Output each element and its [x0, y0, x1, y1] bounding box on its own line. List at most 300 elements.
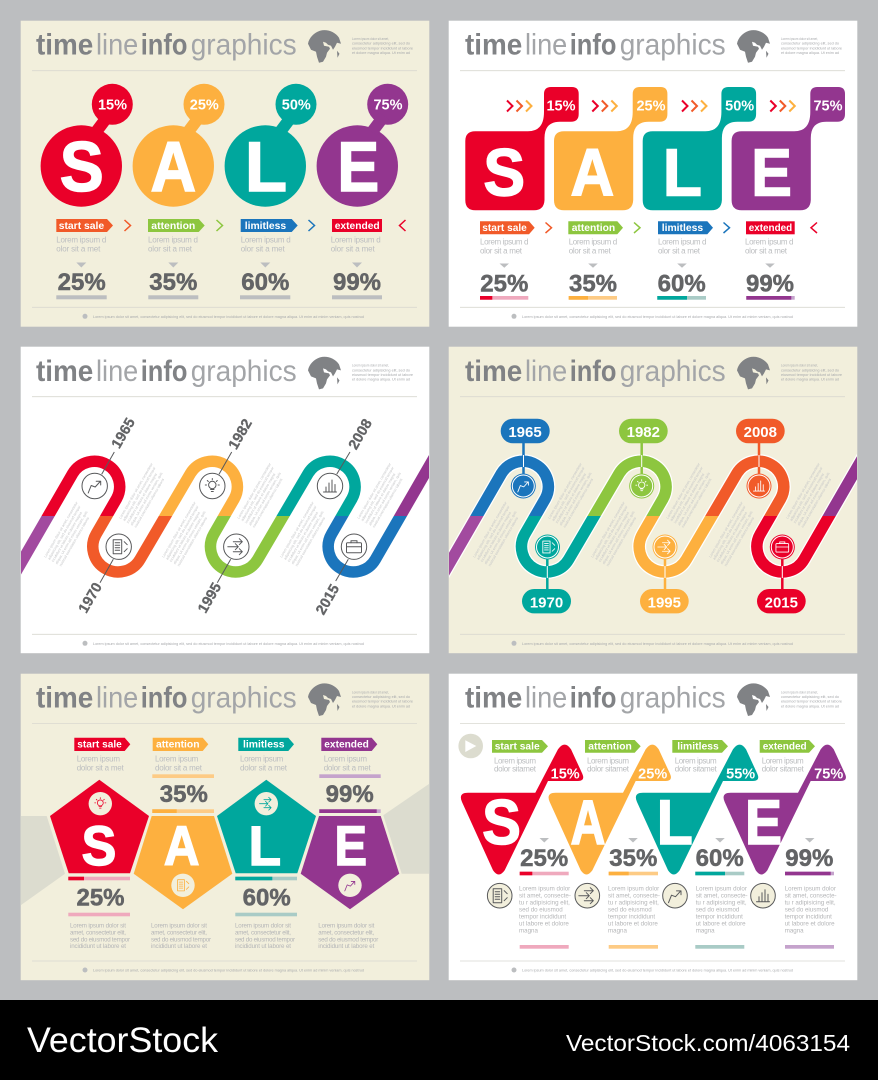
text blocks top: dolor sit a met	[324, 763, 371, 772]
rotated text blocks: adipisicing elit, sed do eiusmod tempor	[283, 504, 318, 561]
pentagon: A: A	[164, 814, 200, 877]
header: et dolore magna aliqua. Ut enim ad	[781, 704, 839, 708]
tag: limitless	[658, 221, 730, 234]
header: Lorem ipsum dolor sit amet,	[781, 690, 818, 694]
header: time	[465, 355, 522, 388]
tag: limitless	[241, 219, 314, 232]
paragraphs: ut labore et dolore	[519, 920, 569, 927]
header: line	[96, 682, 138, 715]
rotated text blocks: Lorem ipsum dolor sit amet, consectetur	[279, 500, 315, 558]
rotated text blocks: nostrud exercitation ullamco laboris	[177, 516, 208, 567]
paragraphs: tempor incididunt	[608, 913, 655, 920]
header	[32, 28, 417, 71]
marker: 1965	[501, 419, 550, 498]
header: Lorem ipsum dolor sit amet,	[352, 364, 389, 368]
paragraphs	[70, 922, 378, 950]
footer note: Lorem ipsum dolor sit amet, consectetur adipisicing elit, sed do eiusmod tempor incididunt ut labore et dolore magna aliqua. Ut enim ad minim veniam, quis nostrud	[522, 315, 793, 319]
text blocks top: dolor sitamet	[494, 765, 537, 774]
paragraphs: sit amet, consecte-	[785, 893, 837, 900]
text blocks top: Lorem ipsum	[762, 756, 804, 765]
stats row: 35%	[569, 271, 617, 298]
marker: 1965: 1965	[508, 424, 542, 441]
shape: orange circle A: 25%	[190, 98, 219, 114]
rotated text blocks: aliqua. Ut enim ad minim veniam, quis	[173, 510, 207, 565]
rotated text blocks: aliqua. Ut enim ad minim veniam, quis	[559, 472, 593, 526]
rotated text blocks: nostrud exercitation ullamco laboris	[681, 478, 713, 528]
rotated text blocks: incididunt ut labore et dolore magna	[555, 473, 587, 524]
paragraphs: Lorem ipsum dolor	[608, 886, 659, 893]
shape: orange circle A	[133, 84, 224, 207]
text blocks	[480, 238, 794, 255]
header: time	[36, 355, 93, 388]
pentagon: L: L	[249, 814, 281, 877]
triangle: L	[636, 745, 758, 874]
header: time	[465, 28, 522, 61]
year labels: 1970	[76, 580, 106, 616]
panel: sale pentagons	[21, 674, 429, 980]
pentagon: L	[217, 780, 316, 877]
shape: purple square E: E	[751, 136, 792, 210]
shape: purple square E: 75%	[813, 99, 843, 115]
pentagon: S: S	[82, 814, 116, 877]
header: et dolore magna aliqua. Ut enim ad	[352, 51, 410, 55]
stats row: 25%	[480, 271, 528, 298]
rotated text blocks: adipisicing elit, sed do eiusmod tempor	[122, 466, 157, 522]
stats row: 35%	[149, 269, 197, 296]
text blocks top: dolor sitamet	[587, 765, 630, 774]
footer note	[460, 634, 845, 646]
stats row: 99%	[326, 781, 374, 808]
text blocks top: dolor sitamet	[762, 765, 804, 774]
pentagon: S	[50, 780, 149, 877]
paragraphs: sed do eiusmod tempor	[318, 936, 378, 943]
triangle: A: A	[570, 788, 605, 858]
triangle: A: 25%	[638, 767, 667, 783]
footer note	[32, 961, 417, 973]
stats row: 35%	[160, 781, 208, 808]
tag: limitless	[238, 738, 294, 751]
header: info	[570, 28, 616, 61]
text blocks top: Lorem ipsum	[324, 754, 367, 763]
text blocks top: dolor sit a met	[240, 763, 288, 772]
text blocks top: Lorem ipsum	[77, 754, 120, 763]
header: line	[525, 682, 567, 715]
text blocks: olor sit a met	[745, 246, 788, 255]
header: time	[36, 682, 93, 715]
rotated text blocks: incididunt ut labore et dolore magna	[126, 473, 158, 524]
header: eiusmod tempor incididunt ut labore	[352, 700, 413, 704]
paragraphs: sit amet, consecte-	[519, 893, 571, 900]
footer note: Lorem ipsum dolor sit amet, consectetur adipisicing elit, sed do eiusmod tempor incididunt ut labore et dolore magna aliqua. Ut enim ad minim veniam, quis nostrud	[93, 969, 364, 973]
rotated text blocks: adipisicing elit, sed do eiusmod tempor	[789, 466, 824, 522]
stats row: 25%	[76, 884, 125, 911]
paragraphs: magna	[696, 927, 715, 934]
rotated text blocks: adipisicing elit, sed do eiusmod tempor	[712, 504, 747, 561]
header: consectetur adipisicing elit, sed do	[781, 695, 839, 699]
shape: purple circle E	[317, 84, 408, 207]
rotated text blocks: Lorem ipsum dolor sit amet, consectetur	[590, 500, 626, 558]
paragraphs: amet, consectetur elit,	[235, 929, 291, 936]
tag: start sale: start sale	[495, 740, 540, 752]
header: eiusmod tempor incididunt ut labore	[781, 700, 842, 704]
header: Lorem ipsum dolor sit amet,	[352, 690, 389, 694]
rotated text blocks: aliqua. Ut enim ad minim veniam, quis	[602, 510, 636, 565]
paragraphs: Lorem ipsum dolor sit	[151, 922, 207, 929]
shape: teal circle L: L	[245, 127, 287, 206]
rotated text blocks: incididunt ut labore et dolore magna	[716, 511, 748, 563]
text blocks top	[494, 756, 804, 774]
stats row	[480, 264, 795, 300]
rotated text blocks: aliqua. Ut enim ad minim veniam, quis	[484, 510, 518, 565]
panel: sale triangles	[449, 674, 857, 980]
rotated text blocks: incididunt ut labore et dolore magna	[673, 473, 705, 524]
paragraphs: Lorem ipsum dolor	[519, 886, 570, 893]
marker: 2015	[757, 534, 806, 613]
paragraphs: Lorem ipsum dolor sit	[318, 922, 375, 929]
rotated text blocks: Lorem ipsum dolor sit amet, consectetur	[118, 462, 154, 520]
paragraphs: magna	[785, 927, 804, 934]
footer note	[460, 961, 845, 973]
header: info	[141, 28, 187, 61]
shape: orange square A: 25%	[636, 99, 666, 115]
paragraphs: tempor incididunt	[696, 913, 743, 920]
footer bar: watermark: VectorStock.com/4063154	[566, 1030, 850, 1056]
marker: 1970	[522, 534, 571, 613]
tag: extended: extended	[749, 222, 792, 234]
header: consectetur adipisicing elit, sed do	[352, 42, 410, 46]
tag: limitless: limitless	[243, 739, 285, 751]
stats row: 99%	[333, 269, 381, 296]
text blocks: olor sit a met	[480, 246, 523, 255]
paragraphs: incididunt ut labore et	[235, 943, 291, 950]
tag: extended: extended	[335, 220, 380, 232]
header: et dolore magna aliqua. Ut enim ad	[352, 378, 410, 382]
header: info	[570, 355, 616, 388]
rotated text blocks: nostrud exercitation ullamco laboris	[134, 478, 165, 528]
tag: attention	[568, 221, 640, 234]
triangle: E	[724, 745, 846, 874]
bottom bars	[520, 945, 834, 949]
stats row	[68, 774, 381, 916]
text blocks top: dolor sit a met	[77, 763, 124, 772]
header: line	[525, 28, 567, 61]
paragraphs: incididunt ut labore et	[70, 943, 126, 950]
rotated text blocks: adipisicing elit, sed do eiusmod tempor	[551, 466, 586, 522]
rotated text blocks: Lorem ipsum dolor sit amet, consectetur	[785, 462, 821, 520]
header: time	[36, 28, 93, 61]
tag: extended	[332, 219, 406, 232]
year labels: 2015	[313, 582, 343, 618]
shape: teal square L	[643, 87, 756, 210]
text blocks top: Lorem ipsum	[587, 756, 629, 765]
rotated text blocks: adipisicing elit, sed do eiusmod tempor	[476, 504, 511, 561]
rotated text blocks	[43, 462, 408, 567]
footer note: Lorem ipsum dolor sit amet, consectetur adipisicing elit, sed do eiusmod tempor incididunt ut labore et dolore magna aliqua. Ut enim ad minim veniam, quis nostrud	[93, 315, 364, 319]
tag: extended	[746, 221, 817, 234]
rotated text blocks: nostrud exercitation ullamco laboris	[59, 516, 90, 567]
paragraphs: incididunt ut labore et	[318, 943, 375, 950]
footer note: Lorem ipsum dolor sit amet, consectetur adipisicing elit, sed do eiusmod tempor incididunt ut labore et dolore magna aliqua. Ut enim ad minim veniam, quis nostrud	[522, 969, 793, 973]
shape: orange square A: A	[570, 136, 614, 210]
tag: start sale: start sale	[482, 222, 527, 234]
text blocks top: Lorem ipsum	[155, 754, 199, 763]
shape: teal square L: 50%	[725, 99, 754, 115]
rotated text blocks: Lorem ipsum dolor sit amet, consectetur	[472, 500, 508, 558]
header: consectetur adipisicing elit, sed do	[781, 368, 839, 372]
rotated text blocks: aliqua. Ut enim ad minim veniam, quis	[291, 510, 325, 565]
shape: orange square A	[554, 87, 667, 210]
paragraphs: ut labore et dolore	[608, 920, 658, 927]
text blocks top: dolor sitamet	[675, 765, 717, 774]
rotated text blocks: aliqua. Ut enim ad minim veniam, quis	[55, 510, 89, 565]
rotated text blocks: incididunt ut labore et dolore magna	[793, 473, 825, 524]
header: graphics	[620, 682, 726, 715]
year labels	[76, 416, 376, 618]
text blocks: olor sit a met	[658, 246, 701, 255]
shape: purple square E	[732, 87, 845, 210]
triangle: E: E	[745, 788, 782, 858]
text blocks: olor sit a met	[148, 245, 193, 254]
header	[32, 682, 417, 724]
footer note	[32, 634, 417, 646]
footer note	[32, 307, 417, 319]
leader lines	[100, 452, 350, 583]
paragraphs: tempor incididunt	[785, 913, 832, 920]
paragraphs: tu r adipisicing elit,	[696, 899, 747, 906]
marker: 2015: 2015	[765, 594, 798, 611]
text blocks top: Lorem ipsum	[675, 756, 717, 765]
text blocks: Lorem ipsum d	[241, 236, 291, 245]
triangle: E: 75%	[814, 767, 843, 783]
timeline ribbon	[21, 455, 429, 578]
header: consectetur adipisicing elit, sed do	[352, 368, 410, 372]
marker: 2008: 2008	[744, 424, 777, 441]
paragraphs: Lorem ipsum dolor sit	[70, 922, 126, 929]
tag: attention: attention	[151, 220, 195, 232]
tag: start sale	[56, 219, 130, 232]
rotated text blocks: nostrud exercitation ullamco laboris	[801, 478, 832, 528]
shape: purple circle E: 75%	[373, 98, 403, 114]
paragraphs: sed do eiusmod	[608, 906, 652, 913]
header: Lorem ipsum dolor sit amet,	[781, 37, 818, 41]
header	[460, 355, 845, 397]
header	[460, 28, 845, 71]
text blocks: Lorem ipsum d	[569, 238, 617, 247]
panel: sale circles	[21, 21, 429, 327]
text blocks: Lorem ipsum d	[331, 236, 381, 245]
paragraphs	[519, 886, 837, 934]
icon: play	[458, 734, 483, 758]
shape: red circle S	[41, 84, 133, 207]
rotated text blocks: adipisicing elit, sed do eiusmod tempor	[669, 466, 704, 522]
rotated text blocks: Lorem ipsum dolor sit amet, consectetur	[237, 462, 272, 520]
header	[460, 682, 845, 724]
header: eiusmod tempor incididunt ut labore	[352, 373, 413, 377]
footer note	[460, 307, 845, 319]
shape: purple circle E: E	[337, 127, 379, 206]
timeline ribbon	[449, 454, 857, 579]
triangle: L: L	[657, 788, 693, 858]
shape: red square S: 15%	[546, 99, 576, 115]
paragraphs: Lorem ipsum dolor	[696, 886, 747, 893]
marker: 1995	[640, 534, 689, 613]
header: graphics	[620, 355, 726, 388]
paragraphs: ut labore et dolore	[696, 920, 746, 927]
paragraphs: sed do eiusmod	[785, 906, 829, 913]
header: Lorem ipsum dolor sit amet,	[781, 364, 818, 368]
header: eiusmod tempor incididunt ut labore	[781, 373, 842, 377]
paragraphs: sed do eiusmod tempor	[151, 936, 211, 943]
icons	[82, 473, 367, 559]
marker: 2008	[736, 419, 785, 498]
rotated text blocks: nostrud exercitation ullamco laboris	[606, 516, 637, 567]
paragraphs: amet, consectetur elit,	[151, 929, 207, 936]
paragraphs: tu r adipisicing elit,	[519, 899, 570, 906]
header: info	[141, 355, 187, 388]
text blocks: Lorem ipsum d	[745, 238, 794, 247]
triple chevrons	[507, 100, 795, 112]
footer bar: watermark: VectorStock	[27, 1021, 219, 1060]
shape: teal circle L: 50%	[282, 98, 311, 114]
text blocks top: Lorem ipsum	[240, 754, 284, 763]
header: line	[525, 355, 567, 388]
stats row: 35%	[609, 845, 657, 872]
rotated text blocks: incididunt ut labore et dolore magna	[598, 511, 630, 563]
text blocks: Lorem ipsum d	[480, 238, 528, 247]
text blocks: Lorem ipsum d	[658, 238, 706, 247]
header: time	[465, 682, 522, 715]
rotated text blocks: incididunt ut labore et dolore magna	[480, 511, 512, 563]
paragraphs: Lorem ipsum dolor	[785, 886, 836, 893]
paragraphs: tempor incididunt	[519, 913, 566, 920]
text blocks: olor sit a met	[241, 245, 285, 254]
header: graphics	[191, 28, 297, 61]
shape: red circle S: S	[60, 127, 104, 206]
rotated text blocks: incididunt ut labore et dolore magna	[51, 511, 83, 563]
header: graphics	[620, 28, 726, 61]
rotated text blocks	[472, 462, 836, 567]
header: Lorem ipsum dolor sit amet,	[352, 37, 389, 41]
header: consectetur adipisicing elit, sed do	[781, 42, 839, 46]
rotated text blocks: nostrud exercitation ullamco laboris	[252, 478, 284, 528]
triangle: S: 15%	[551, 767, 580, 783]
text blocks: olor sit a met	[331, 245, 375, 254]
tag: attention: attention	[156, 739, 200, 751]
paragraphs: amet, consectetur elit,	[70, 929, 126, 936]
tag: attention	[148, 219, 222, 232]
rotated text blocks: Lorem ipsum dolor sit amet, consectetur	[161, 500, 197, 558]
footer note: Lorem ipsum dolor sit amet, consectetur adipisicing elit, sed do eiusmod tempor incididunt ut labore et dolore magna aliqua. Ut enim ad minim veniam, quis nostrud	[522, 642, 793, 646]
text blocks: Lorem ipsum d	[148, 236, 198, 245]
rotated text blocks: Lorem ipsum dolor sit amet, consectetur	[666, 462, 701, 520]
stats row: 60%	[696, 845, 744, 872]
rotated text blocks: adipisicing elit, sed do eiusmod tempor	[165, 504, 200, 561]
paragraphs: sit amet, consecte-	[608, 893, 660, 900]
stats row	[56, 262, 382, 299]
paragraphs: amet, consectetur elit,	[318, 929, 375, 936]
marker: 1982: 1982	[627, 424, 660, 441]
text blocks top: Lorem ipsum	[494, 756, 536, 765]
panel: sale squares	[449, 21, 857, 327]
shape: teal circle L	[225, 84, 316, 207]
stats row: 25%	[520, 845, 568, 872]
marker: 1995: 1995	[648, 594, 681, 611]
triangle: A	[549, 745, 671, 874]
paragraphs: tu r adipisicing elit,	[785, 899, 836, 906]
paragraphs: magna	[519, 927, 538, 934]
shape: red square S	[465, 87, 579, 210]
text blocks: olor sit a met	[569, 246, 611, 255]
paragraphs: sed do eiusmod	[519, 906, 563, 913]
header: consectetur adipisicing elit, sed do	[352, 695, 410, 699]
rotated text blocks: nostrud exercitation ullamco laboris	[488, 516, 519, 567]
pentagon: E	[301, 814, 399, 909]
icons	[487, 883, 775, 908]
rotated text blocks: adipisicing elit, sed do eiusmod tempor	[360, 466, 395, 522]
rotated text blocks: aliqua. Ut enim ad minim veniam, quis	[248, 472, 282, 526]
rotated text blocks: incididunt ut labore et dolore magna	[364, 473, 396, 524]
paragraphs: sed do eiusmod tempor	[70, 936, 130, 943]
rotated text blocks: nostrud exercitation ullamco laboris	[295, 516, 326, 567]
shape: orange circle A: A	[150, 127, 196, 206]
rotated text blocks: Lorem ipsum dolor sit amet, consectetur	[43, 500, 79, 558]
stats row: 99%	[785, 845, 833, 872]
triangle: S	[461, 745, 583, 874]
rotated text blocks: nostrud exercitation ullamco laboris	[563, 478, 594, 528]
text blocks: olor sit a met	[56, 245, 101, 254]
stats row: 99%	[746, 271, 794, 298]
rotated text blocks: adipisicing elit, sed do eiusmod tempor	[47, 504, 82, 561]
rotated text blocks: aliqua. Ut enim ad minim veniam, quis	[677, 472, 711, 526]
header: info	[141, 682, 187, 715]
header: eiusmod tempor incididunt ut labore	[781, 46, 842, 50]
stats row: 25%	[58, 269, 106, 296]
stats row: 60%	[243, 884, 291, 911]
shape: red square S: S	[483, 136, 525, 210]
rotated text blocks: nostrud exercitation ullamco laboris	[724, 516, 755, 567]
pentagon: A	[134, 814, 232, 909]
header: info	[570, 682, 616, 715]
pentagon: E: E	[335, 814, 367, 877]
marker: 1982	[619, 419, 668, 498]
tag: limitless: limitless	[662, 222, 703, 234]
tag: attention: attention	[588, 740, 632, 752]
footer note: Lorem ipsum dolor sit amet, consectetur adipisicing elit, sed do eiusmod tempor incididunt ut labore et dolore magna aliqua. Ut enim ad minim veniam, quis nostrud	[93, 642, 364, 646]
stats row: 60%	[658, 271, 706, 298]
stats row	[520, 838, 834, 875]
tag: start sale: start sale	[77, 739, 122, 751]
text blocks top: dolor sit a met	[155, 763, 203, 772]
rotated text blocks: aliqua. Ut enim ad minim veniam, quis	[368, 472, 402, 526]
header: et dolore magna aliqua. Ut enim ad	[781, 378, 839, 382]
rotated text blocks: adipisicing elit, sed do eiusmod tempor	[240, 466, 275, 522]
footer bar: watermark	[0, 1000, 878, 1080]
rotated text blocks: incididunt ut labore et dolore magna	[169, 511, 201, 563]
tag: attention: attention	[572, 222, 615, 234]
rotated text blocks: adipisicing elit, sed do eiusmod tempor	[594, 504, 629, 561]
text blocks top	[77, 754, 371, 772]
paragraphs: incididunt ut labore et	[151, 943, 207, 950]
year labels: 1982	[226, 417, 256, 452]
header: et dolore magna aliqua. Ut enim ad	[352, 704, 410, 708]
tag: extended: extended	[763, 740, 807, 752]
tag: limitless: limitless	[677, 740, 719, 752]
header: line	[96, 28, 138, 61]
header: graphics	[191, 682, 297, 715]
shape: teal square L: L	[663, 136, 702, 210]
stats row: 60%	[241, 269, 289, 296]
rotated text blocks: aliqua. Ut enim ad minim veniam, quis	[130, 472, 164, 526]
